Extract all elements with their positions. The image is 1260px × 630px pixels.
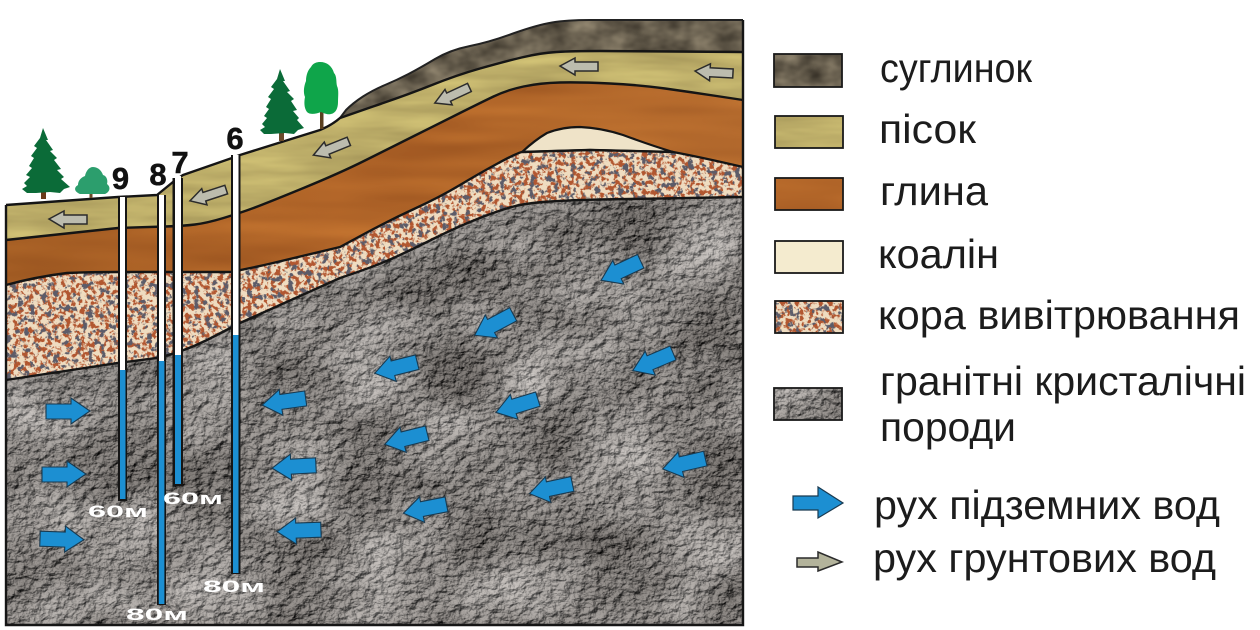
legend [774,45,1246,581]
layer: clay [5,78,744,293]
well 8 [157,195,166,605]
swatch: weathering crust [775,301,843,333]
label: weathering crust: кора вивітрювання [878,292,1240,338]
arrow [431,80,473,111]
arrow [492,387,542,425]
tree: round green [304,62,338,129]
arrow [660,446,708,482]
arrow [46,398,90,424]
arrow [187,182,229,209]
layer: weathering crust [5,148,744,383]
label: granite line 2: породи [880,404,1016,450]
legend arrow: shallow water [797,552,842,571]
well 7 [172,176,183,486]
depth label well 8: 80м [126,605,188,624]
arrow [310,133,352,163]
swatch: clay [775,178,843,210]
arrow [49,211,87,228]
arrow [260,386,308,418]
arrow [560,58,598,75]
arrow [596,250,646,292]
arrow [277,517,321,545]
arrow [527,472,575,506]
tree: small teal [75,167,109,198]
legend arrow: groundwater [793,487,843,518]
arrow [468,303,520,347]
depth label well 6: 80м [203,577,265,596]
tree: fir right [260,69,304,141]
geological cross-section panel [5,18,744,626]
arrow [628,341,678,383]
layer: loam [339,19,743,118]
arrow [401,492,449,526]
label: groundwater: рух підземних вод [874,482,1220,528]
depth label well 9: 60м [88,502,148,521]
swatch: loam [774,54,842,87]
well number 6: 6 [226,121,244,156]
arrow [40,525,84,553]
label: clay: глина [880,168,988,214]
depth label well 7: 60м [163,489,223,508]
layer: granite crystalline rocks [5,195,744,626]
panel frame [6,20,743,625]
label: granite line 1: гранітні кристалічні [880,358,1246,404]
arrow [271,453,317,481]
layer: sand [5,48,744,248]
arrow [382,421,430,457]
arrow [372,350,420,386]
swatch: sand [775,116,843,148]
well number 8: 8 [149,157,167,192]
label: kaolin: коалін [878,231,999,277]
well number 7: 7 [171,145,189,180]
arrow [695,63,733,82]
well 9 [118,197,127,501]
blue arrows: groundwater flow [40,250,708,553]
swatch: kaolin [775,241,843,273]
label: loam: суглинок [880,45,1033,91]
label: sand: пісок [879,106,977,152]
grey arrows: shallow water flow [49,58,733,228]
label: shallow water: рух грунтових вод [873,535,1216,581]
arrow [42,461,86,487]
swatch: granite [774,388,842,420]
layer: kaolin [522,127,673,152]
well 6 [231,155,240,574]
tree: fir left [22,128,70,199]
well number 9: 9 [112,161,129,196]
